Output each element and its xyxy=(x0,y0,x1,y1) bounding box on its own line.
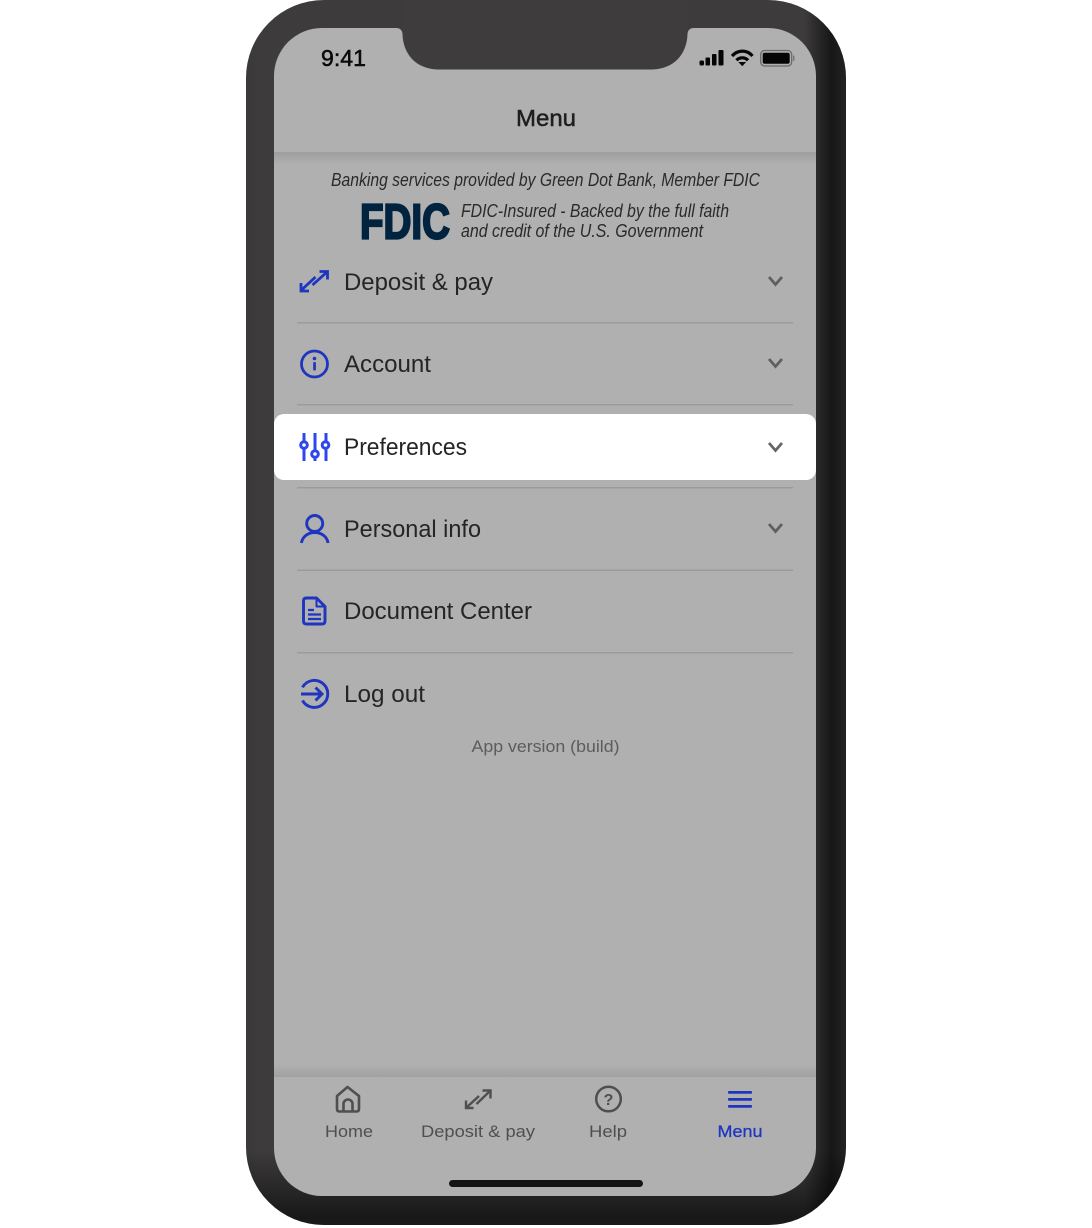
icon: document xyxy=(304,598,325,624)
icon: chevron xyxy=(769,359,782,366)
icon: wifi xyxy=(732,51,752,66)
icon: log out xyxy=(301,680,328,707)
menu row: account: Account xyxy=(344,351,431,378)
highlighted row: preferences: Preferences xyxy=(344,434,467,461)
tab: menu active xyxy=(718,1091,762,1141)
phone frame xyxy=(246,0,846,1225)
icon: home xyxy=(337,1087,359,1112)
home indicator xyxy=(449,1180,643,1187)
icon: help circle: ? xyxy=(604,1092,613,1109)
menu row: document center: Document Center xyxy=(344,598,532,625)
icon: info circle xyxy=(302,351,328,377)
menu row: log out: Log out xyxy=(344,681,425,708)
app version text: App version (build) xyxy=(472,737,620,756)
FDIC insurance statement: and credit of the U.S. Government xyxy=(461,221,704,241)
status bar time: 9:41 xyxy=(321,45,366,71)
highlighted row: preferences xyxy=(274,414,816,480)
tab: deposit and pay: Deposit & pay xyxy=(421,1122,536,1141)
disclosure text: Banking services provided by Green Dot Bank, Member FDIC xyxy=(331,170,761,190)
icon: hamburger xyxy=(728,1091,752,1108)
icon: person xyxy=(302,516,328,543)
tab: deposit and pay xyxy=(421,1090,536,1141)
menu row: deposit and pay xyxy=(301,269,782,296)
icon: chevron xyxy=(769,277,782,284)
tab: home xyxy=(325,1087,373,1141)
phone screen xyxy=(274,28,816,1196)
menu row: personal info xyxy=(302,516,782,543)
tab: help xyxy=(589,1087,627,1141)
menu row: personal info: Personal info xyxy=(344,516,481,543)
heading: menu: Menu xyxy=(516,105,576,131)
icon: deposit arrows xyxy=(301,272,328,291)
icon: chevron xyxy=(769,524,782,532)
FDIC insurance statement xyxy=(461,201,729,241)
menu row: deposit and pay: Deposit & pay xyxy=(344,269,493,296)
menu row: account xyxy=(302,351,782,378)
tab: home: Home xyxy=(325,1122,373,1141)
FDIC insurance statement: FDIC-Insured - Backed by the full faith xyxy=(461,201,729,221)
icon: sliders xyxy=(301,433,329,461)
notch xyxy=(402,0,688,70)
tab: help: Help xyxy=(589,1122,627,1141)
icon: chevron xyxy=(769,443,782,450)
menu row: log out xyxy=(301,680,425,708)
FDIC logo: FDIC xyxy=(360,196,450,250)
header shadow xyxy=(274,152,816,165)
icon: battery xyxy=(761,50,794,66)
icon: signal strength xyxy=(700,50,724,66)
tab bar shadow xyxy=(274,1065,816,1077)
tab: menu active: Menu xyxy=(718,1122,762,1141)
icon: deposit arrows xyxy=(466,1090,490,1108)
